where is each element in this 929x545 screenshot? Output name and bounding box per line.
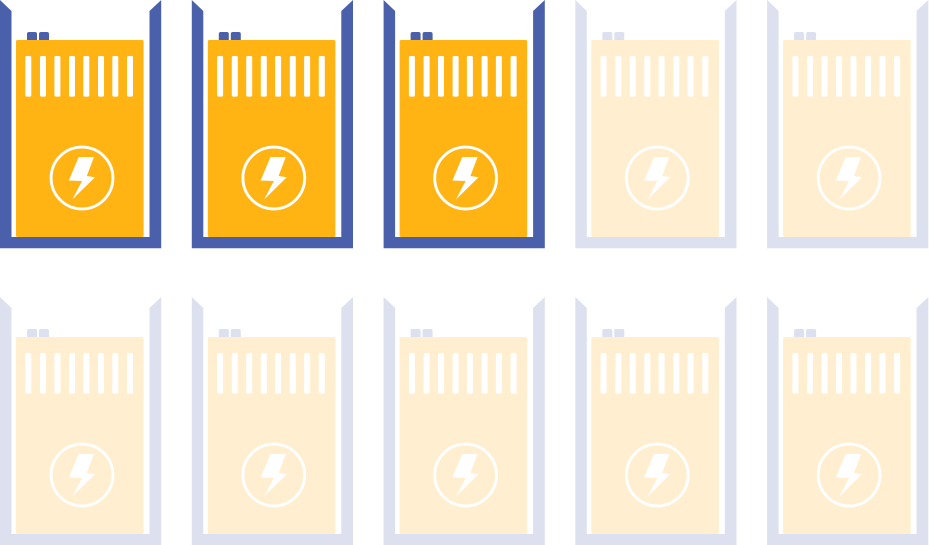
terminals [602, 32, 624, 41]
battery body [783, 40, 911, 237]
vent slots [601, 56, 708, 97]
vent slots [25, 353, 133, 394]
terminals [794, 329, 816, 338]
icon: lightning circle [818, 444, 880, 506]
battery 2 (filled) [192, 0, 353, 248]
vent slots [217, 353, 325, 394]
battery 10 (faded) [767, 297, 928, 545]
battery body [16, 337, 144, 534]
battery 8 (faded) [384, 297, 545, 545]
battery 4 (faded) [575, 0, 736, 248]
battery 7 (faded) [192, 297, 353, 545]
terminals [27, 329, 49, 338]
battery 6 (faded) [0, 297, 161, 545]
battery body [591, 337, 719, 534]
container frame [192, 0, 353, 248]
battery 1 (filled) [0, 0, 161, 248]
icon: lightning circle [51, 147, 113, 209]
terminals [794, 32, 816, 41]
container frame [0, 297, 161, 545]
battery body [16, 40, 144, 237]
container frame [575, 0, 736, 248]
battery body [400, 40, 527, 237]
icon: lightning circle [435, 444, 496, 506]
vent slots [601, 353, 708, 394]
container frame [192, 297, 353, 545]
icon: lightning circle [51, 444, 113, 506]
battery 9 (faded) [575, 297, 736, 545]
vent slots [409, 56, 517, 97]
terminals [27, 32, 49, 41]
battery body [783, 337, 911, 534]
icon: lightning circle [818, 147, 880, 209]
icon: lightning circle [243, 444, 305, 506]
icon: lightning circle [626, 444, 688, 506]
container frame [384, 297, 545, 545]
terminals [411, 329, 433, 338]
battery body [208, 337, 335, 534]
icon: lightning circle [626, 147, 688, 209]
terminals [411, 32, 433, 41]
container frame [575, 297, 736, 545]
terminals [219, 32, 241, 41]
icon: lightning circle [243, 147, 305, 209]
vent slots [25, 56, 133, 97]
icon: lightning circle [435, 147, 496, 209]
container frame [767, 0, 928, 248]
terminals [219, 329, 241, 338]
battery body [591, 40, 719, 237]
vent slots [792, 56, 900, 97]
battery 3 (filled) [384, 0, 545, 248]
battery body [208, 40, 335, 237]
terminals [602, 329, 624, 338]
vent slots [409, 353, 517, 394]
vent slots [792, 353, 900, 394]
battery 5 (faded) [767, 0, 928, 248]
container frame [767, 297, 928, 545]
vent slots [217, 56, 325, 97]
container frame [0, 0, 161, 248]
battery body [400, 337, 527, 534]
container frame [384, 0, 545, 248]
